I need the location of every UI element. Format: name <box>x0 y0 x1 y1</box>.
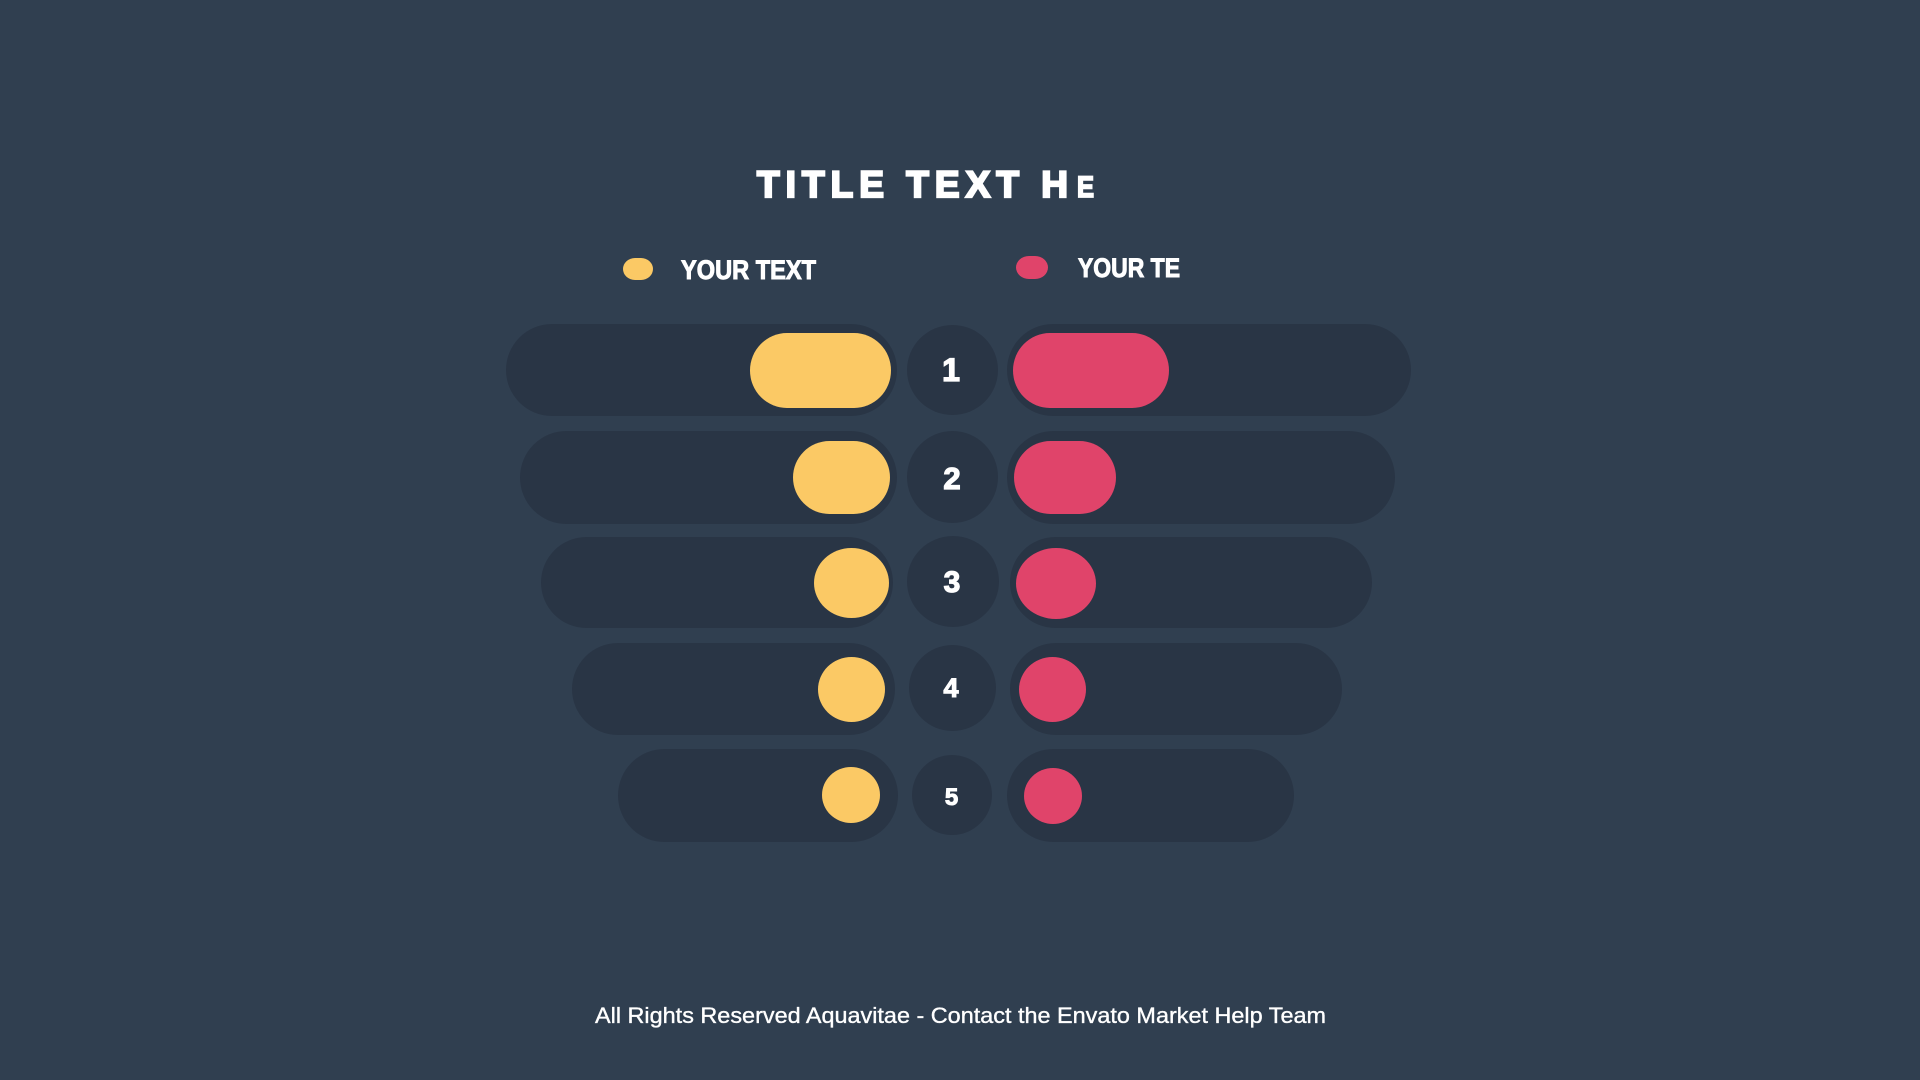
red bar 1 <box>1013 333 1169 408</box>
legend: red series <box>1016 253 1180 283</box>
number badge 3 <box>907 536 999 627</box>
red bar 2 <box>1014 441 1116 514</box>
red bar 3 <box>1016 548 1096 619</box>
red bar 5 <box>1024 768 1082 824</box>
yellow bar 3 <box>814 548 889 618</box>
number badge 5 <box>912 755 992 835</box>
yellow bar 1 <box>750 333 891 408</box>
row 3 <box>541 536 1372 628</box>
number badge 4 <box>909 645 996 731</box>
legend: yellow series: YOUR TEXT <box>681 255 816 285</box>
number badge 1: 1 <box>942 352 960 388</box>
number badge 5: 5 <box>945 784 958 811</box>
red bar 4 <box>1019 657 1086 722</box>
number badge 3: 3 <box>944 566 960 599</box>
yellow bar 4 <box>818 657 885 722</box>
number badge 4: 4 <box>943 673 959 703</box>
number badge 1 <box>907 325 998 415</box>
left track 2 <box>520 431 897 524</box>
right track 1 <box>1007 324 1411 416</box>
right track 4 <box>1010 643 1342 735</box>
right track 2 <box>1007 431 1395 524</box>
right track 5 <box>1007 749 1294 842</box>
left track 1 <box>506 324 897 416</box>
number badge 2: 2 <box>943 461 961 496</box>
row 4 <box>572 643 1342 735</box>
row 1 <box>506 324 1411 416</box>
left track 5 <box>618 749 898 842</box>
row 2 <box>520 431 1395 524</box>
right track 3 <box>1010 537 1372 628</box>
legend: yellow series <box>623 255 816 285</box>
number badge 2 <box>907 431 998 523</box>
title: E <box>1077 171 1094 204</box>
legend: red series: YOUR TE <box>1078 253 1180 283</box>
footer credit: All Rights Reserved Aquavitae - Contact the Envato Market Help Team <box>595 1003 1326 1028</box>
left track 4 <box>572 643 895 735</box>
row 5 <box>618 749 1294 842</box>
yellow bar 2 <box>793 441 890 514</box>
yellow bar 5 <box>822 767 880 823</box>
title: TITLE TEXT H <box>757 164 1068 205</box>
left track 3 <box>541 537 893 628</box>
